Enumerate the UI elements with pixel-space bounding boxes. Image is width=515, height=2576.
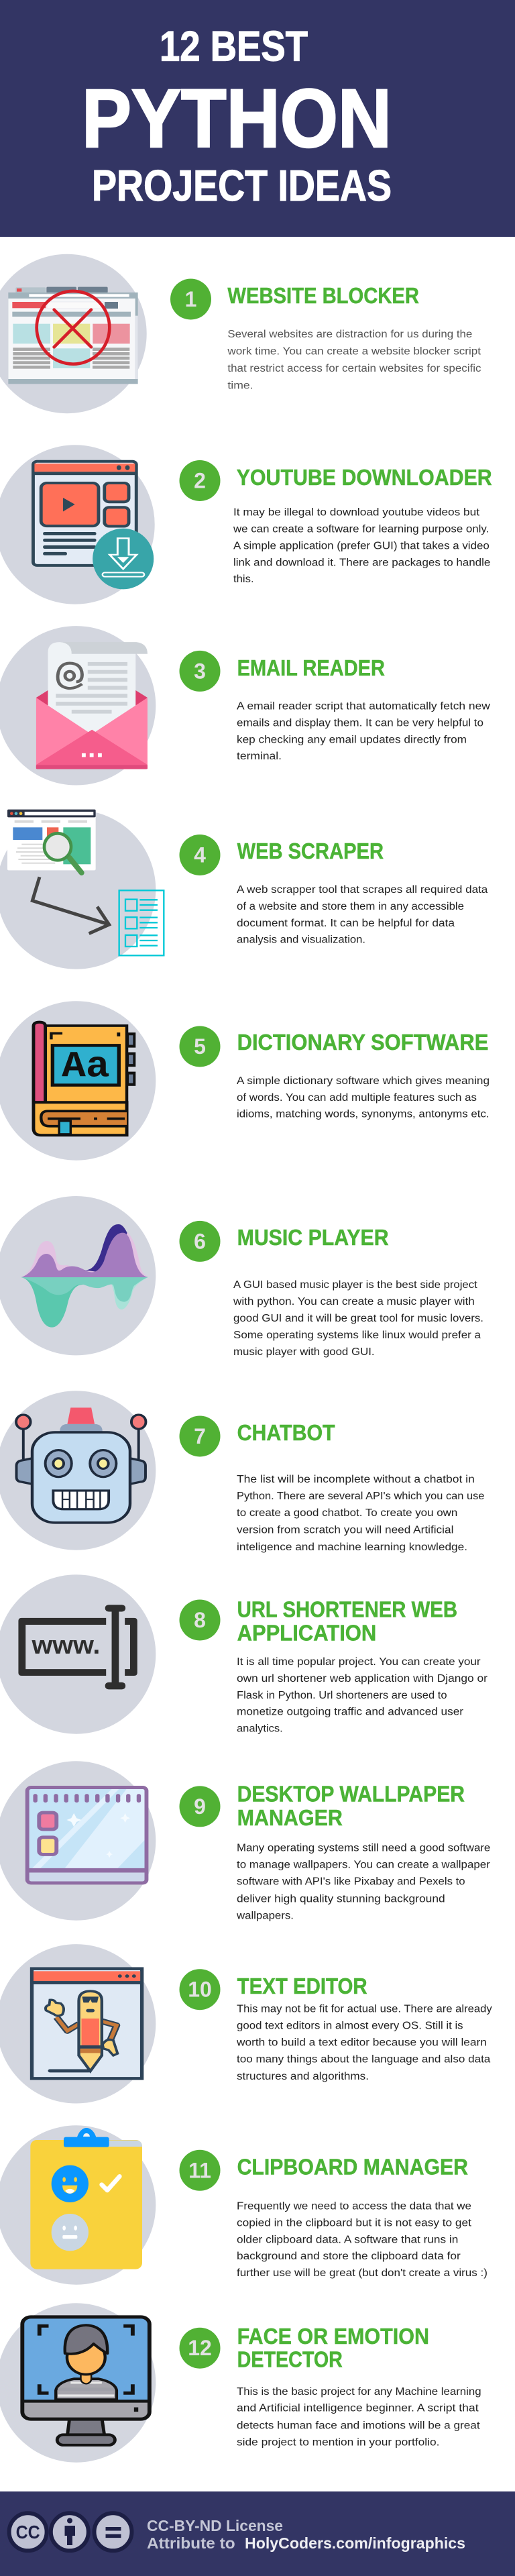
body text: to create a good chatbot. To create you own <box>237 1507 457 1519</box>
attribution text: Attribute to <box>147 2534 235 2552</box>
body text: A simple dictionary software which gives meaning <box>237 1075 490 1087</box>
icon: scrape page to document <box>7 810 164 955</box>
number badge <box>180 651 220 692</box>
body text: worth to build a text editor because you will learn <box>236 2037 487 2048</box>
icon: video download <box>33 462 154 589</box>
attribution text <box>147 2534 465 2552</box>
body text: structures and algorithms. <box>237 2071 369 2082</box>
body text: Frequently we need to access the data that we <box>237 2200 471 2212</box>
body text: too many things about the language and also data <box>237 2053 491 2065</box>
body text: own url shortener web application with Django or <box>237 1673 488 1684</box>
background circle <box>0 2303 156 2463</box>
panel: 12 face or emotion detector <box>0 2303 481 2463</box>
number badge: 8 <box>194 1608 206 1632</box>
body text: Python. There are several API's which you can use <box>237 1491 484 1502</box>
body text: and Artificial intelligence beginner. A script that <box>237 2403 479 2414</box>
body text: older clipboard data. A software that runs in <box>237 2234 458 2245</box>
panel: 11 clipboard manager <box>0 2125 488 2285</box>
background circle <box>0 1001 156 1161</box>
body text: side project to mention in your portfolio. <box>237 2436 439 2448</box>
icon: cc <box>9 2513 47 2551</box>
heading: WEB SCRAPER <box>237 839 384 863</box>
icon: open envelope with letter <box>36 642 148 769</box>
footer license <box>9 2513 465 2552</box>
title <box>82 23 392 210</box>
body text <box>237 2386 481 2448</box>
body text: music player with good GUI. <box>233 1346 375 1358</box>
background circle <box>0 254 147 413</box>
number badge <box>180 1786 220 1827</box>
icon: blocked website <box>8 287 138 384</box>
number badge <box>180 2150 220 2191</box>
number badge: 10 <box>188 1978 212 2002</box>
body text: This is the basic project for any Machine learning <box>237 2386 481 2398</box>
body text: to manage wallpapers. You can create a wallpaper <box>237 1860 490 1870</box>
number badge: 6 <box>194 1229 206 1253</box>
body text <box>237 2200 488 2279</box>
icon: no derivatives equals <box>94 2513 131 2551</box>
number badge <box>180 1026 220 1067</box>
body text: emails and display them. It can be very helpful to <box>237 717 483 729</box>
number badge <box>180 1969 220 2010</box>
icon: robot head <box>16 1407 146 1523</box>
number badge: 7 <box>194 1424 206 1448</box>
body text: time. <box>227 380 253 392</box>
heading: TEXT EDITOR <box>237 1974 367 1998</box>
body text: Flask in Python. Url shorteners are used to <box>237 1690 447 1701</box>
heading: YOUTUBE DOWNLOADER <box>237 465 492 490</box>
icon: pencil character in window <box>32 1969 142 2078</box>
icon: cc: CC <box>16 2522 40 2542</box>
heading: WEBSITE BLOCKER <box>227 283 419 308</box>
body text: Several websites are distraction for us during the <box>227 329 472 340</box>
background circle <box>0 1944 156 2104</box>
body text <box>237 1075 490 1120</box>
body text: version from scratch you will need Artificial <box>237 1525 453 1536</box>
body text: It is all time popular project. You can create your <box>237 1656 481 1668</box>
body text: kep checking any email updates directly from <box>237 734 467 745</box>
panel: 3 email reader <box>0 626 491 785</box>
heading: URL SHORTENER WEB <box>237 1597 457 1622</box>
panel: 1 website blocker <box>0 254 481 413</box>
body text: background and store the clipboard data for <box>237 2251 461 2262</box>
body text: detects human face and imotions will be a great <box>237 2420 480 2431</box>
number badge: 3 <box>194 659 206 683</box>
body text: It may be illegal to download youtube videos but <box>233 507 480 519</box>
icon: clipboard with faces <box>30 2128 142 2269</box>
body text: good text editors in almost every OS. Still it is <box>237 2021 463 2031</box>
body text: idioms, matching words, synonyms, antonyms etc. <box>237 1109 490 1120</box>
heading: CHATBOT <box>237 1420 335 1445</box>
heading: DICTIONARY SOFTWARE <box>237 1030 488 1055</box>
heading: MANAGER <box>237 1805 343 1830</box>
header banner <box>0 0 515 237</box>
body text <box>236 1843 490 1921</box>
background circle <box>0 626 156 785</box>
number badge: 9 <box>194 1794 206 1819</box>
number badge: 1 <box>185 287 196 311</box>
body text: A email reader script that automatically fetch new <box>237 701 491 712</box>
body text <box>227 329 481 392</box>
panel: 10 text editor <box>0 1944 492 2104</box>
body text: A web scrapper tool that scrapes all required data <box>237 884 488 896</box>
icon: wallpaper screen <box>27 1787 147 1883</box>
heading <box>237 2324 429 2372</box>
body text <box>233 1279 483 1358</box>
panel: 6 music player <box>0 1196 483 1358</box>
body text: this. <box>233 574 254 585</box>
body text: This may not be fit for actual use. There are already <box>237 2004 492 2015</box>
body text <box>237 701 491 762</box>
icon: attribution person <box>51 2513 89 2551</box>
icon: dictionary book <box>34 1022 135 1135</box>
icon: www address bar <box>18 1605 137 1689</box>
heading <box>237 1782 465 1830</box>
number badge <box>180 460 220 501</box>
number badge <box>180 2328 220 2369</box>
body text: monetize outgoing traffic and advanced user <box>237 1707 463 1718</box>
panel: 5 dictionary software <box>0 1001 490 1161</box>
body text: analysis and visualization. <box>237 934 365 946</box>
heading: MUSIC PLAYER <box>237 1225 389 1250</box>
body text <box>233 507 490 585</box>
icon: sound wave <box>21 1224 148 1328</box>
background circle <box>0 1761 156 1921</box>
body text: with python. You can create a music player with <box>233 1296 475 1307</box>
number badge: 12 <box>188 2336 212 2360</box>
number badge <box>170 279 211 319</box>
body text: document format. It can be helpful for data <box>237 918 455 929</box>
body text <box>237 884 488 946</box>
icon: www address bar: www. <box>32 1630 100 1659</box>
body text <box>237 1474 484 1553</box>
icon: face detection monitor <box>22 2317 150 2445</box>
background circle <box>0 445 155 604</box>
number badge <box>180 1221 220 1262</box>
body text: further use will be great (but don't create a virus :) <box>237 2267 488 2279</box>
number badge <box>180 835 220 875</box>
heading: FACE OR EMOTION <box>237 2324 429 2349</box>
body text: Some operating systems like linux would prefer a <box>233 1330 481 1341</box>
body text: The list will be incomplete without a chatbot in <box>237 1474 475 1485</box>
number badge <box>180 1415 220 1457</box>
body text: A simple application (prefer GUI) that takes a video <box>233 540 490 551</box>
body text: Many operating systems still need a good software <box>237 1843 490 1854</box>
background circle <box>0 2125 156 2285</box>
heading: DESKTOP WALLPAPER <box>237 1782 465 1807</box>
heading <box>237 1597 457 1646</box>
license text: CC-BY-ND License <box>147 2517 283 2534</box>
icon: dictionary book: Aa <box>62 1046 110 1088</box>
heading: EMAIL READER <box>237 655 385 680</box>
body text <box>236 2004 492 2082</box>
title: 12 BEST <box>160 23 308 70</box>
background circle <box>0 1196 156 1355</box>
body text: work time. You can create a website blocker script <box>227 346 481 358</box>
body text: link and download it. There are packages to handle <box>233 557 490 568</box>
heading: APPLICATION <box>237 1621 376 1646</box>
body text: A GUI based music player is the best side project <box>233 1279 477 1291</box>
background circle <box>0 810 156 969</box>
footer band <box>0 2491 515 2576</box>
attribution text: HolyCoders.com/infographics <box>245 2534 465 2552</box>
panel: 4 web scraper <box>0 810 488 969</box>
panel: 2 youtube downloader <box>0 445 492 604</box>
title: PYTHON <box>82 73 392 165</box>
body text: we can create a software for learning purpose only. <box>233 523 489 535</box>
body text: analytics. <box>237 1723 283 1735</box>
title: PROJECT IDEAS <box>92 161 392 210</box>
background circle <box>0 1391 156 1550</box>
body text: that restrict access for certain websites for specific <box>227 363 481 374</box>
body text: inteligence and machine learning knowledge. <box>237 1542 467 1553</box>
panel: 7 chatbot <box>0 1391 484 1553</box>
body text: good GUI and it will be great tool for music lovers. <box>233 1313 483 1324</box>
number badge: 5 <box>194 1034 206 1059</box>
number badge: 2 <box>194 468 206 492</box>
number badge: 11 <box>188 2158 211 2182</box>
panel: 8 url shortener <box>0 1574 488 1735</box>
heading: CLIPBOARD MANAGER <box>237 2155 468 2180</box>
number badge <box>180 1599 220 1641</box>
body text <box>237 1656 488 1735</box>
panel: 9 desktop wallpaper <box>0 1761 490 1921</box>
body text: of a website and store them in any accessible <box>237 901 464 912</box>
body text: software with API's like Pixabay and Pexels to <box>237 1876 465 1887</box>
body text: copied in the clipboard but it is not easy to get <box>237 2217 472 2229</box>
number badge: 4 <box>194 843 206 867</box>
body text: of words. You can add multiple features such as <box>237 1092 477 1104</box>
body text: terminal. <box>237 751 282 762</box>
body text: deliver high quality stunning background <box>237 1893 445 1905</box>
heading: DETECTOR <box>237 2347 343 2372</box>
background circle <box>0 1574 156 1734</box>
body text: wallpapers. <box>236 1910 294 1921</box>
